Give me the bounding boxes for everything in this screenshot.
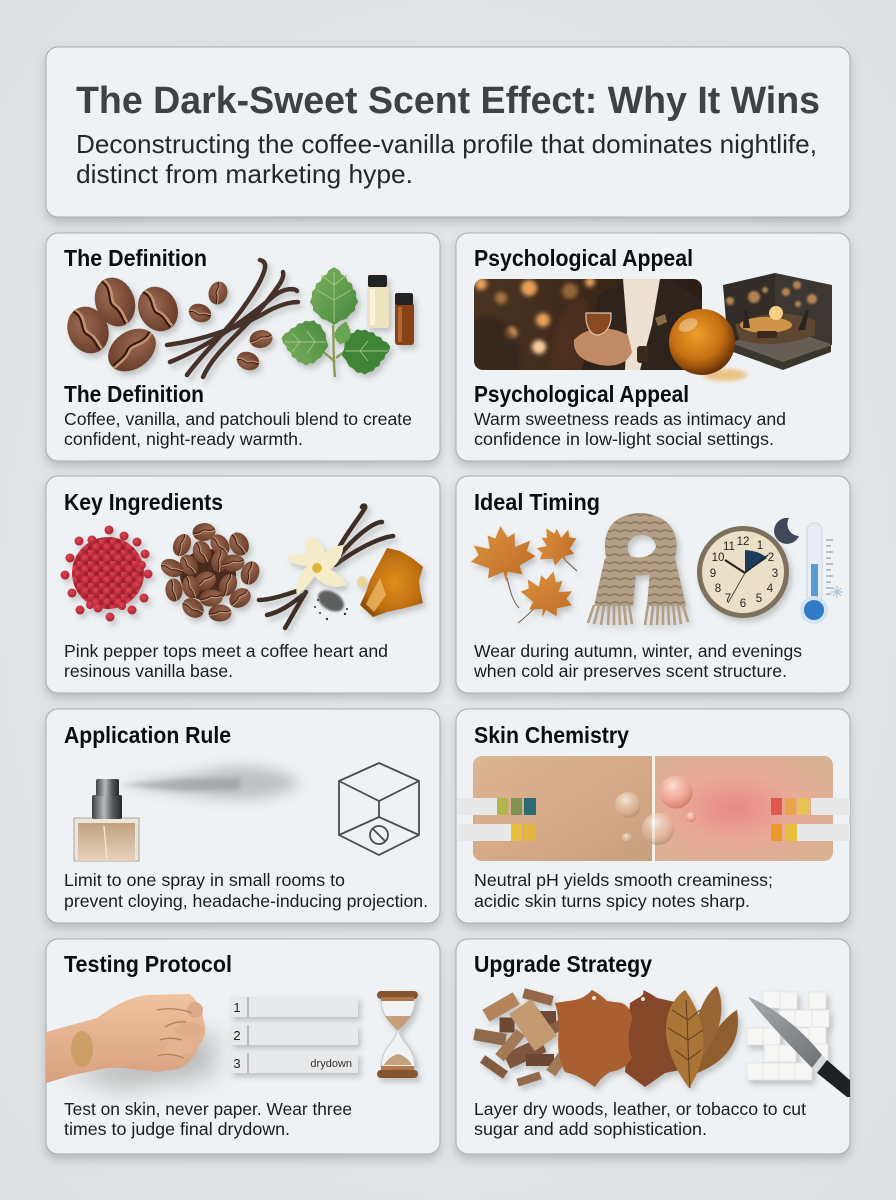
icon: tobacco leaves	[666, 986, 738, 1088]
icon: right pH strips	[771, 798, 850, 841]
body text: Pink pepper tops meet a coffee heart and	[64, 641, 388, 661]
icon: clock: 8	[715, 583, 721, 595]
subheading: Psychological Appeal	[474, 381, 689, 407]
title: The Dark-Sweet Scent Effect: Why It Wins	[76, 80, 820, 122]
body text	[474, 870, 773, 911]
body text: Limit to one spray in small rooms to	[64, 870, 345, 890]
heading: the definition: The Definition	[64, 245, 207, 271]
icon: knife	[748, 997, 852, 1097]
icon: numbered test strips: 2	[233, 1028, 241, 1043]
body text	[473, 641, 802, 681]
body text	[64, 641, 388, 681]
heading: upgrade strategy: Upgrade Strategy	[474, 951, 652, 977]
icon: leather swatches	[555, 990, 682, 1087]
icon: clock: 1	[757, 540, 763, 552]
body text: resinous vanilla base.	[64, 661, 233, 681]
icon: wrist and hand	[46, 994, 215, 1090]
body text	[474, 409, 786, 449]
panel: key ingredients	[46, 476, 440, 693]
icon: spray mist	[119, 767, 302, 799]
body text: Coffee, vanilla, and patchouli blend to create	[64, 409, 412, 429]
icon: numbered test strips: drydown	[310, 1058, 352, 1070]
image: skin comparison	[473, 756, 833, 861]
icon: clock: 3	[772, 568, 778, 580]
panel: testing protocol	[46, 939, 440, 1154]
icon: numbered test strips: 1	[233, 1000, 241, 1015]
icon: sugar cubes	[747, 991, 829, 1080]
icon: crescent moon	[774, 518, 799, 544]
icon: essential oil vials	[367, 275, 414, 345]
body text: times to judge final drydown.	[64, 1119, 290, 1139]
icon: numbered test strips: 3	[233, 1056, 241, 1071]
body text: acidic skin turns spicy notes sharp.	[474, 891, 750, 911]
heading: skin chemistry: Skin Chemistry	[474, 722, 629, 748]
subtitle	[76, 129, 817, 189]
body text	[474, 1099, 806, 1139]
icon: left pH strips	[457, 798, 536, 841]
panel: psychological appeal	[456, 233, 850, 461]
panel: application rule	[46, 709, 440, 923]
icon: clock: 6	[740, 598, 746, 610]
icon: clock: 12	[737, 536, 749, 548]
icon: miniature lounge room	[723, 273, 832, 370]
photo: man with glass in lounge	[474, 277, 702, 370]
icon: amber sphere	[669, 309, 747, 381]
subheading: The Definition	[64, 381, 204, 407]
panel: the definition	[46, 233, 440, 461]
icon: wood chips	[473, 988, 575, 1087]
icon: patchouli leaves	[278, 267, 394, 378]
icon: clock: 9	[710, 568, 716, 580]
body text: prevent cloying, headache-inducing projection.	[64, 891, 428, 911]
icon: pink pepper pile	[60, 526, 152, 622]
panel: upgrade strategy	[456, 939, 852, 1154]
icon: clock: 5	[756, 593, 762, 605]
body text: Neutral pH yields smooth creaminess;	[474, 870, 773, 890]
icon: numbered test strips	[230, 997, 358, 1073]
icon: autumn leaves	[468, 518, 585, 624]
heading: psychological appeal: Psychological Appeal	[474, 245, 693, 271]
icon: coffee beans	[60, 272, 274, 380]
panel: ideal timing	[456, 476, 850, 693]
icon: clock	[697, 526, 789, 618]
icon: perfume bottle	[74, 779, 139, 861]
body text: Layer dry woods, leather, or tobacco to cut	[474, 1099, 806, 1119]
icon: amber resin chunk	[357, 548, 423, 617]
body text	[64, 1099, 352, 1139]
heading: key ingredients: Key Ingredients	[64, 489, 223, 515]
icon: thermometer	[800, 523, 843, 624]
body text: when cold air preserves scent structure.	[473, 661, 787, 681]
body text	[64, 870, 428, 911]
icon: small room cube	[339, 763, 419, 855]
icon: clock: 7	[725, 593, 731, 605]
icon: clock: 2	[768, 552, 774, 564]
panel: header	[46, 47, 850, 217]
heading: ideal timing: Ideal Timing	[474, 489, 600, 515]
icon: coffee bean pile	[158, 522, 262, 622]
icon: clock: 4	[767, 583, 774, 595]
subtitle: distinct from marketing hype.	[76, 159, 413, 189]
body text: Warm sweetness reads as intimacy and	[474, 409, 786, 429]
subtitle: Deconstructing the coffee-vanilla profile that dominates nightlife,	[76, 129, 817, 159]
heading: testing protocol: Testing Protocol	[64, 951, 232, 977]
icon: knitted scarf	[588, 513, 688, 625]
icon: water droplets	[615, 776, 696, 845]
panel: skin chemistry	[456, 709, 850, 923]
body text: confident, night-ready warmth.	[64, 429, 303, 449]
icon: vanilla pods	[167, 260, 298, 377]
body text	[64, 409, 412, 449]
body text: Test on skin, never paper. Wear three	[64, 1099, 352, 1119]
icon: clock: 11	[723, 541, 735, 553]
icon: hourglass	[377, 991, 418, 1078]
body text: confidence in low-light social settings.	[474, 429, 774, 449]
body text: sugar and add sophistication.	[474, 1119, 707, 1139]
icon: vanilla flower and pods	[259, 506, 393, 628]
icon: clock: 10	[712, 552, 724, 564]
heading: application rule: Application Rule	[64, 722, 231, 748]
body text: Wear during autumn, winter, and evenings	[474, 641, 802, 661]
